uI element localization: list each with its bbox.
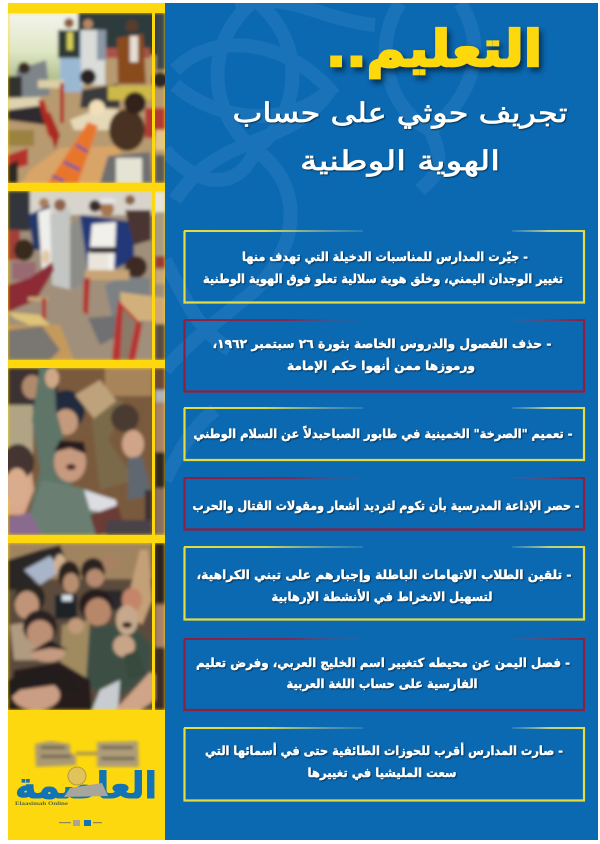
panel: item 7: [184, 727, 585, 800]
panel: item 2: [184, 319, 585, 392]
logo: old city skyline: [35, 741, 139, 767]
logo: grey swoosh: [64, 783, 108, 797]
text block: الفارسية على حساب اللغة العربية: [286, 676, 478, 691]
text block: - صارت المدارس أقرب للحوزات الطائفية حتى في أسمائها التي: [205, 742, 563, 758]
background ornament: [165, 0, 474, 480]
text block: لتسهيل الانخراط في الأنشطة الإرهابية: [272, 589, 492, 604]
logo: Al-Asimah Online: [15, 741, 157, 826]
panel: item 6: [184, 638, 585, 710]
text block: - تلقين الطلاب الاتهامات الباطلة وإجبارهم على تبني الكراهية،: [196, 567, 572, 582]
subheading line 2: الهوية الوطنية: [300, 146, 500, 177]
logo: legend marks: [59, 820, 102, 826]
panel: item 1: [184, 230, 585, 302]
text block: - تعميم "الصرخة" الخمينية في طابور الصباحبدلاً عن السلام الوطني: [194, 425, 572, 442]
text block: - فصل اليمن عن محيطه كتغيير اسم الخليج العربي، وفرض تعليم: [196, 655, 570, 670]
photo: officials among seated pupils: [8, 191, 165, 360]
photo: crowd of students with raised fists: [8, 543, 165, 710]
left column: yellow frame: [8, 3, 165, 840]
yellow divider bands: [8, 3, 165, 710]
blue panel: [165, 0, 598, 840]
panel: item 3: [184, 407, 585, 460]
logo: latin tagline: Elaasimah Online: [15, 801, 69, 807]
text block: سعت المليشيا في تغييرها: [308, 765, 456, 780]
heading: education: التعليم..: [326, 20, 542, 78]
logo: wordmark: العاصمة: [15, 766, 157, 807]
panel: item 5: [184, 546, 585, 620]
photo: officials visiting a classroom: [8, 13, 168, 183]
text block: - حذف الفصول والدروس الخاصة بثورة ٢٦ سبتمبر ١٩٦٢،: [212, 336, 552, 351]
text block: تغيير الوجدان اليمني، وخلق هوية سلالية تعلو فوق الهوية الوطنية: [203, 271, 563, 286]
text block: - جيّرت المدارس للمناسبات الدخيلة التي تهدف منها: [242, 249, 528, 264]
logo: emblem: [68, 767, 86, 785]
panel: item 4: [184, 477, 585, 530]
subheading line 1: تجريف حوثي على حساب: [232, 98, 568, 129]
photo: students chanting: [2, 365, 165, 535]
text block: ورموزها ممن أنهوا حكم الإمامة: [287, 357, 475, 373]
title: [232, 20, 568, 177]
